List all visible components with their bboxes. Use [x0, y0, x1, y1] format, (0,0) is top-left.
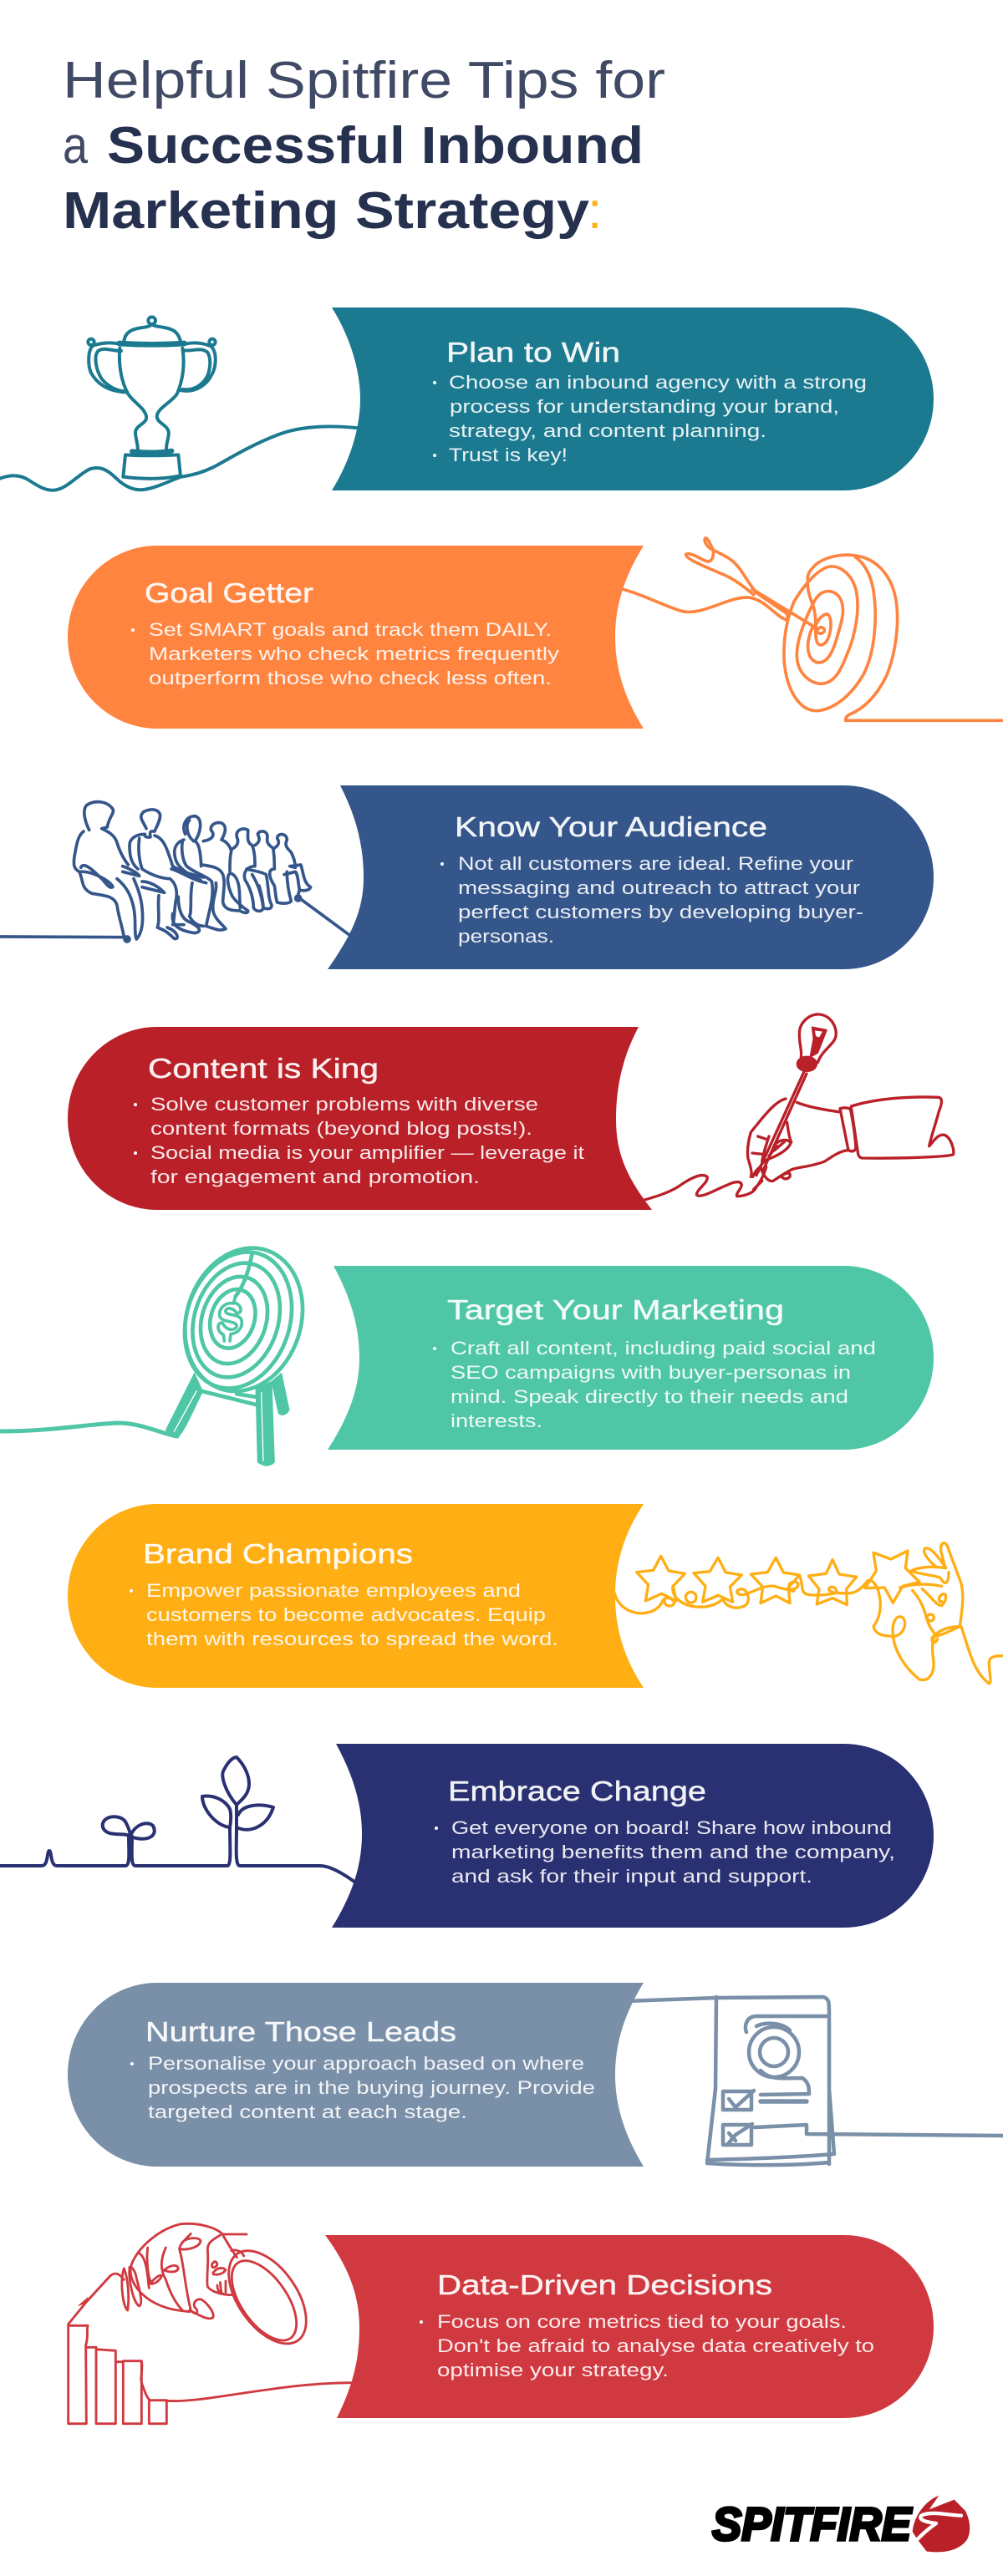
body text: marketing benefits them and the company,: [451, 1842, 895, 1862]
card shape: [68, 1983, 644, 2167]
body text: perfect customers by developing buyer-: [458, 902, 863, 922]
panel: Goal Getter: [68, 546, 644, 729]
body text: and ask for their input and support.: [451, 1866, 812, 1887]
icon: growing plants: [0, 1757, 358, 1884]
body text: optimise your strategy.: [437, 2360, 669, 2380]
logo wordmark: SPITFIRE: [712, 2497, 913, 2550]
body text: outperform those who check less often.: [149, 668, 552, 688]
logo flame mark: [913, 2496, 970, 2552]
card shape: [328, 785, 934, 969]
title: a: [63, 117, 88, 175]
heading: Target Your Marketing: [447, 1294, 784, 1325]
body text: Choose an inbound agency with a strong: [449, 372, 867, 393]
body text: process for understanding your brand,: [450, 396, 839, 417]
card shape: [68, 1027, 652, 1210]
body text: mind. Speak directly to their needs and: [451, 1386, 848, 1407]
body text: [433, 1338, 876, 1431]
body text: Trust is key!: [449, 445, 568, 465]
title: Marketing Strategy: [63, 182, 590, 240]
body text: prospects are in the buying journey. Provide: [148, 2077, 595, 2098]
body text: interests.: [451, 1410, 542, 1431]
heading: Data-Driven Decisions: [437, 2269, 772, 2300]
body text: SEO campaigns with buyer-personas in: [451, 1362, 851, 1383]
body text: personas.: [458, 926, 554, 947]
body text: Social media is your amplifier — leverage it: [150, 1142, 585, 1163]
title: [63, 52, 665, 240]
body text: Not all customers are ideal. Refine your: [458, 853, 854, 874]
body text: [440, 853, 863, 947]
card shape: [68, 1504, 644, 1688]
panel: Target Your Marketing: [328, 1266, 934, 1450]
heading: Nurture Those Leads: [145, 2016, 456, 2047]
heading: Embrace Change: [448, 1776, 706, 1806]
panel: Plan to Win: [332, 307, 934, 490]
icon: trophy: [0, 317, 361, 490]
icon: stars and hand: [614, 1543, 1003, 1684]
body text: content formats (beyond blog posts!).: [150, 1118, 532, 1139]
body text: Don't be afraid to analyse data creatively to: [437, 2335, 874, 2356]
body text: Empower passionate employees and: [146, 1580, 521, 1601]
body text: strategy, and content planning.: [449, 420, 766, 441]
body text: customers to become advocates. Equip: [146, 1604, 546, 1625]
heading: Know Your Audience: [455, 811, 767, 842]
heading: Content is King: [148, 1053, 379, 1084]
body text: Solve customer problems with diverse: [150, 1094, 538, 1115]
body text: [130, 2053, 595, 2122]
body text: messaging and outreach to attract your: [458, 877, 861, 898]
card shape: [325, 2235, 934, 2418]
body text: Marketers who check metrics frequently: [149, 643, 560, 664]
icon: arrow in target: [619, 538, 1003, 720]
icon: hand with magnifier over bars: [69, 2223, 355, 2424]
card shape: [68, 546, 644, 729]
body text: Set SMART goals and track them DAILY.: [149, 619, 552, 640]
icon: hand drawing lightbulb: [641, 1014, 954, 1201]
body text: Craft all content, including paid social and: [451, 1338, 876, 1359]
body text: Personalise your approach based on where: [148, 2053, 584, 2074]
body text: them with resources to spread the word.: [146, 1628, 558, 1649]
logo: Spitfire: [712, 2496, 970, 2552]
body text: [420, 2311, 874, 2380]
icon: checklist document: [627, 1997, 1003, 2165]
title: :: [588, 182, 602, 240]
body text: [130, 1580, 558, 1649]
icon: dollar target on easel: [0, 1232, 321, 1466]
heading: Brand Champions: [143, 1538, 413, 1569]
incoming line: [0, 1423, 177, 1436]
icon: seated audience: [0, 802, 353, 942]
panel: Embrace Change: [332, 1744, 934, 1928]
body text: [134, 1094, 585, 1187]
card shape: [332, 1744, 934, 1928]
body text: Get everyone on board! Share how inbound: [451, 1817, 892, 1838]
panel: Brand Champions: [68, 1504, 644, 1688]
card shape: [332, 307, 934, 490]
body text: Focus on core metrics tied to your goals.: [437, 2311, 847, 2332]
panel: Know Your Audience: [328, 785, 934, 969]
body text: targeted content at each stage.: [148, 2101, 467, 2122]
card shape: [328, 1266, 934, 1450]
body text: [435, 1817, 895, 1887]
heading: Plan to Win: [446, 337, 620, 368]
title: Helpful Spitfire Tips for: [63, 52, 665, 109]
panel: Content is King: [68, 1027, 652, 1210]
title: Successful Inbound: [107, 117, 644, 175]
panel: Nurture Those Leads: [68, 1983, 644, 2167]
heading: Goal Getter: [145, 577, 313, 608]
panel: Data-Driven Decisions: [325, 2235, 934, 2418]
body text: for engagement and promotion.: [150, 1166, 480, 1187]
body text: [131, 619, 560, 688]
body text: [433, 372, 867, 465]
